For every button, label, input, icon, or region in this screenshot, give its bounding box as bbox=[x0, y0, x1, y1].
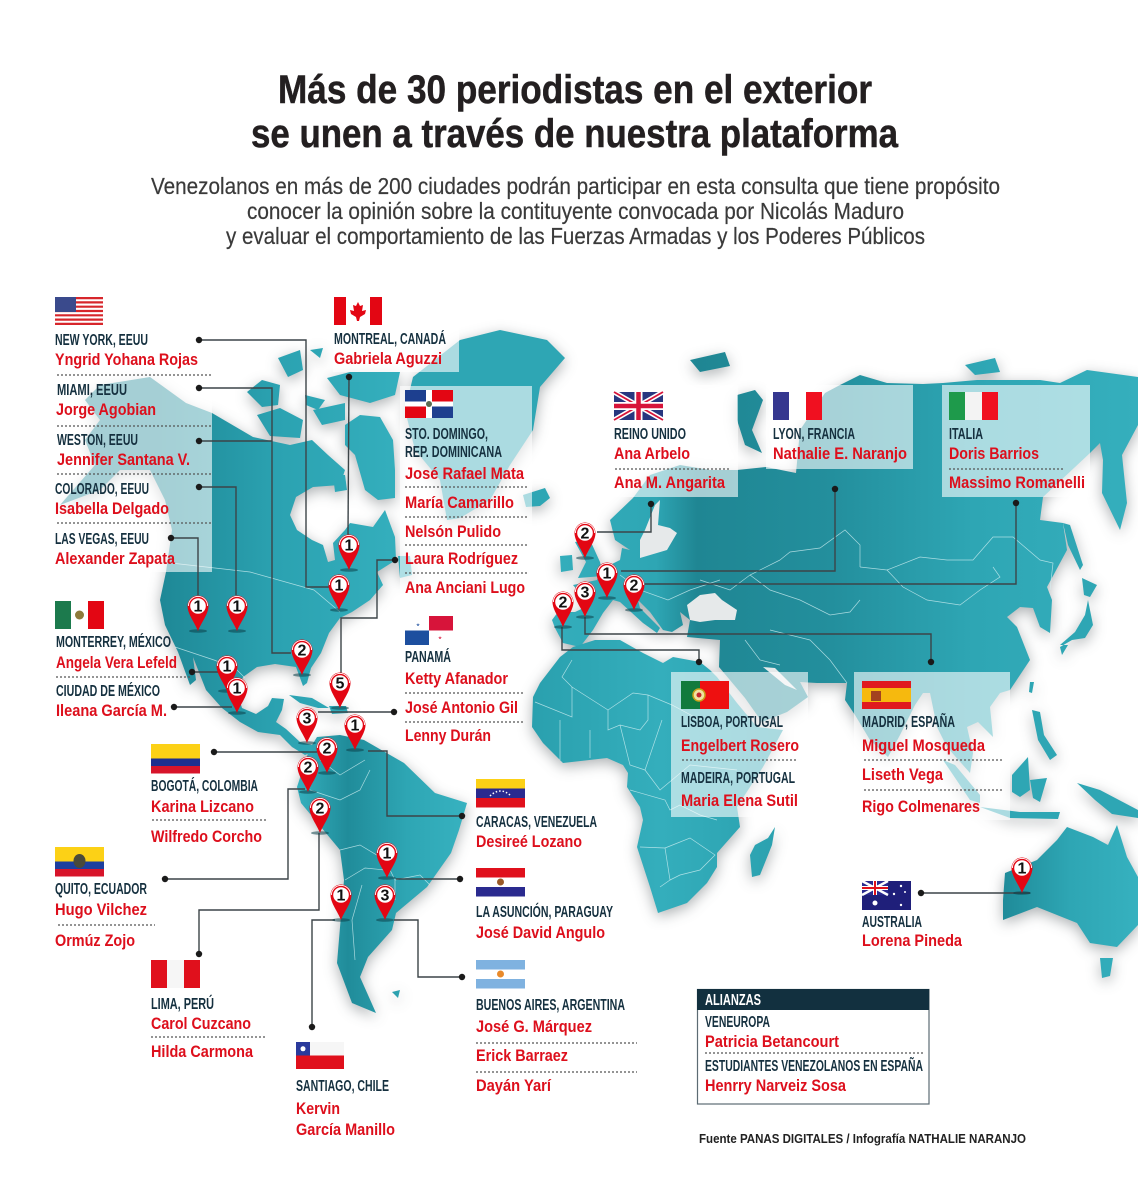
subtitle text block: Venezolanos en más de 200 ciudades podrán participar en esta consulta que tiene propósito bbox=[151, 173, 1000, 199]
panel: Portugal: MADEIRA, PORTUGAL bbox=[681, 770, 795, 787]
panel: EEUU correspondents: Alexander Zapata bbox=[55, 549, 175, 568]
source credit: Fuente PANAS DIGITALES / Infografía NATHALIE NARANJO bbox=[699, 1131, 1026, 1146]
map pins: 1 bbox=[345, 538, 354, 555]
panel: Francia: Nathalie E. Naranjo bbox=[773, 444, 907, 463]
panel: México bbox=[55, 601, 190, 720]
panel: Portugal: LISBOA, PORTUGAL bbox=[681, 714, 783, 731]
leader line end dots bbox=[162, 337, 1019, 1030]
panel: Colombia bbox=[151, 744, 267, 846]
icon: Portugal flag bbox=[681, 681, 729, 709]
map pins: 2 bbox=[581, 526, 590, 543]
panel: Italia bbox=[949, 392, 1085, 492]
icon: Spain flag bbox=[862, 681, 911, 709]
icon: Mexico flag bbox=[55, 601, 104, 629]
panel: Argentina: Dayán Yarí bbox=[476, 1076, 552, 1095]
panel: EEUU correspondents: COLORADO, EEUU bbox=[55, 481, 149, 498]
panel: EEUU correspondents: LAS VEGAS, EEUU bbox=[55, 531, 149, 548]
panel: Venezuela bbox=[476, 779, 597, 851]
map: country borders bbox=[171, 530, 1053, 960]
panel: Alianzas: ESTUDIANTES VENEZOLANOS EN ESPAÑA bbox=[705, 1057, 923, 1075]
subtitle text block: y evaluar el comportamiento de las Fuerzas Armadas y los Poderes Públicos bbox=[226, 223, 925, 249]
Alianzas header bbox=[697, 989, 929, 1010]
Alianzas header: ALIANZAS bbox=[705, 992, 761, 1009]
panel: República Dominicana: STO. DOMINGO, bbox=[405, 426, 488, 443]
panel: Perú: Carol Cuzcano bbox=[151, 1014, 251, 1033]
panel: EEUU correspondents: Jorge Agobian bbox=[56, 400, 156, 419]
panel: México: Ileana García M. bbox=[56, 701, 167, 720]
icon: Argentina flag bbox=[476, 960, 525, 988]
panel: México: CIUDAD DE MÉXICO bbox=[56, 683, 160, 700]
panel: Perú: LIMA, PERÚ bbox=[151, 995, 214, 1013]
panel: México: Angela Vera Lefeld bbox=[56, 653, 177, 672]
panel: República Dominicana: María Camarillo bbox=[405, 493, 514, 512]
title: se unen a través de nuestra plataforma bbox=[251, 112, 899, 156]
panel: Australia: Lorena Pineda bbox=[862, 931, 962, 950]
map pins: 2 bbox=[316, 801, 325, 818]
panel: República Dominicana: REP. DOMINICANA bbox=[405, 444, 502, 461]
panel: España bbox=[862, 681, 1004, 816]
subtitle text block bbox=[151, 173, 1000, 249]
icon: Panama flag bbox=[405, 616, 453, 645]
panel: Francia: LYON, FRANCIA bbox=[773, 426, 855, 443]
map pins: 1 bbox=[351, 718, 360, 735]
panel: Argentina: Erick Barraez bbox=[476, 1046, 568, 1065]
map pins: 1 bbox=[233, 599, 242, 616]
panel: Argentina bbox=[476, 960, 637, 1095]
panel: Chile: Kervin bbox=[296, 1099, 340, 1118]
map pins: 3 bbox=[381, 888, 390, 905]
panel: Canadá bbox=[334, 297, 446, 368]
panel: Italia: Massimo Romanelli bbox=[949, 473, 1085, 492]
panel: Alianzas: Henrry Narveiz Sosa bbox=[705, 1076, 846, 1095]
panel: Chile: García Manillo bbox=[296, 1120, 395, 1139]
subtitle text block: conocer la opinión sobre la contituyente convocada por Nicolás Maduro bbox=[247, 198, 904, 224]
panel: República Dominicana: Ana Anciani Lugo bbox=[405, 578, 525, 597]
label backing panels bbox=[40, 296, 1090, 820]
panel: España: Rigo Colmenares bbox=[862, 797, 980, 816]
icon: Chile flag bbox=[296, 1042, 344, 1069]
panel: Alianzas: Patricia Betancourt bbox=[705, 1032, 839, 1051]
panel: Paraguay: LA ASUNCIÓN, PARAGUAY bbox=[476, 903, 613, 921]
map pins: 2 bbox=[304, 760, 313, 777]
map pins: 1 bbox=[603, 566, 612, 583]
panel: Canadá: Gabriela Aguzzi bbox=[334, 349, 442, 368]
panel: Argentina: José G. Márquez bbox=[476, 1017, 592, 1036]
map pins: 1 bbox=[337, 888, 346, 905]
panel: Colombia: BOGOTÁ, COLOMBIA bbox=[151, 778, 258, 795]
map pins: 3 bbox=[303, 711, 312, 728]
panel: República Dominicana: José Rafael Mata bbox=[405, 464, 524, 483]
panel: Portugal: Engelbert Rosero bbox=[681, 736, 799, 755]
panel: México: MONTERREY, MÉXICO bbox=[56, 634, 171, 651]
panel: República Dominicana bbox=[405, 390, 527, 597]
icon: Italy flag bbox=[949, 392, 998, 420]
map: North America bbox=[60, 348, 412, 755]
panel: Paraguay bbox=[476, 868, 613, 942]
map: Australia bbox=[1003, 825, 1138, 978]
panel: Panamá: José Antonio Gil bbox=[405, 698, 518, 717]
panel: EEUU correspondents bbox=[55, 297, 212, 568]
panel: Perú bbox=[151, 960, 265, 1061]
icon: US flag bbox=[55, 297, 103, 325]
panel: Panamá bbox=[405, 616, 525, 745]
map pins: 1 bbox=[335, 578, 344, 595]
panel: Portugal bbox=[681, 681, 799, 810]
panel: EEUU correspondents: Jennifer Santana V. bbox=[57, 450, 190, 469]
panel: Ecuador: Hugo Vilchez bbox=[55, 900, 147, 919]
icon: Canada flag bbox=[334, 297, 382, 325]
map pins bbox=[188, 522, 1032, 922]
title bbox=[251, 68, 899, 156]
icon: Australia flag bbox=[862, 881, 911, 910]
icon: Peru flag bbox=[151, 960, 200, 988]
panel: Ecuador: QUITO, ECUADOR bbox=[55, 881, 147, 898]
map pins: 2 bbox=[298, 643, 307, 660]
map pins: 2 bbox=[630, 578, 639, 595]
map pins: 5 bbox=[336, 676, 345, 693]
panel: EEUU correspondents: Isabella Delgado bbox=[55, 499, 169, 518]
map: Greenland and Iceland bbox=[405, 330, 565, 520]
map: inland seas bbox=[640, 500, 797, 690]
panel: Reino Unido: REINO UNIDO bbox=[614, 426, 686, 443]
map: Asia islands bbox=[870, 523, 1138, 819]
map pins: 1 bbox=[1018, 861, 1027, 878]
panel: Panamá: Lenny Durán bbox=[405, 726, 491, 745]
panel: Reino Unido: Ana Arbelo bbox=[614, 444, 690, 463]
panel: Chile: SANTIAGO, CHILE bbox=[296, 1078, 389, 1095]
panel: Paraguay: José David Angulo bbox=[476, 923, 605, 942]
panel: Alianzas: VENEUROPA bbox=[705, 1014, 770, 1031]
panel: España: MADRID, ESPAÑA bbox=[862, 713, 955, 731]
panel: España: Liseth Vega bbox=[862, 765, 943, 784]
map pins: 2 bbox=[323, 741, 332, 758]
panel: EEUU correspondents: Yngrid Yohana Rojas bbox=[55, 350, 198, 369]
map: Africa bbox=[532, 640, 783, 913]
panel: Colombia: Karina Lizcano bbox=[151, 797, 254, 816]
icon: Colombia flag bbox=[151, 744, 200, 774]
panel: Alianzas bbox=[697, 989, 929, 1104]
map pins: 3 bbox=[581, 585, 590, 602]
panel: EEUU correspondents: WESTON, EEUU bbox=[57, 432, 138, 449]
panel: Italia: ITALIA bbox=[949, 426, 983, 443]
panel: Ecuador: Ormúz Zojo bbox=[55, 931, 135, 950]
map pins: 1 bbox=[223, 659, 232, 676]
panel: EEUU correspondents: NEW YORK, EEUU bbox=[55, 332, 148, 349]
panel: España: Miguel Mosqueda bbox=[862, 736, 985, 755]
icon: Paraguay flag bbox=[476, 868, 525, 896]
panel: Australia: AUSTRALIA bbox=[862, 914, 922, 931]
icon: Dominican Republic flag bbox=[405, 390, 453, 418]
panel: Portugal: Maria Elena Sutil bbox=[681, 791, 798, 810]
map: South America bbox=[297, 735, 467, 1013]
panel: República Dominicana: Nelsón Pulido bbox=[405, 522, 501, 541]
panel: Reino Unido: Ana M. Angarita bbox=[614, 473, 725, 492]
panel: Panamá: PANAMÁ bbox=[405, 649, 451, 666]
map pins: 1 bbox=[383, 846, 392, 863]
icon: France flag bbox=[773, 392, 822, 420]
panel: Venezuela: Desireé Lozano bbox=[476, 832, 582, 851]
panel: Canadá: MONTREAL, CANADÁ bbox=[334, 331, 446, 348]
panel: Francia bbox=[773, 392, 907, 463]
panel: Panamá: Ketty Afanador bbox=[405, 669, 508, 688]
map: Eurasia bbox=[552, 352, 1138, 773]
panel: Argentina: BUENOS AIRES, ARGENTINA bbox=[476, 997, 625, 1014]
icon: Ecuador flag bbox=[55, 847, 104, 876]
panel: República Dominicana: Laura Rodríguez bbox=[405, 549, 518, 568]
panel: EEUU correspondents: MIAMI, EEUU bbox=[57, 382, 127, 399]
world map bbox=[60, 330, 1138, 1013]
icon: UK flag bbox=[614, 392, 663, 420]
leader lines bbox=[165, 340, 1030, 1027]
panel: Italia: Doris Barrios bbox=[949, 444, 1039, 463]
map pins: 1 bbox=[233, 681, 242, 698]
panel: Perú: Hilda Carmona bbox=[151, 1042, 253, 1061]
map pins: 1 bbox=[194, 599, 203, 616]
panel: Chile bbox=[296, 1042, 395, 1139]
panel: Venezuela: CARACAS, VENEZUELA bbox=[476, 814, 597, 831]
title: Más de 30 periodistas en el exterior bbox=[278, 68, 872, 112]
panel: Reino Unido bbox=[614, 392, 731, 492]
panel: Ecuador bbox=[55, 847, 155, 950]
panel: Colombia: Wilfredo Corcho bbox=[151, 827, 262, 846]
map pins: 2 bbox=[559, 595, 568, 612]
icon: Venezuela flag bbox=[476, 779, 525, 808]
panel: Australia bbox=[862, 881, 962, 950]
